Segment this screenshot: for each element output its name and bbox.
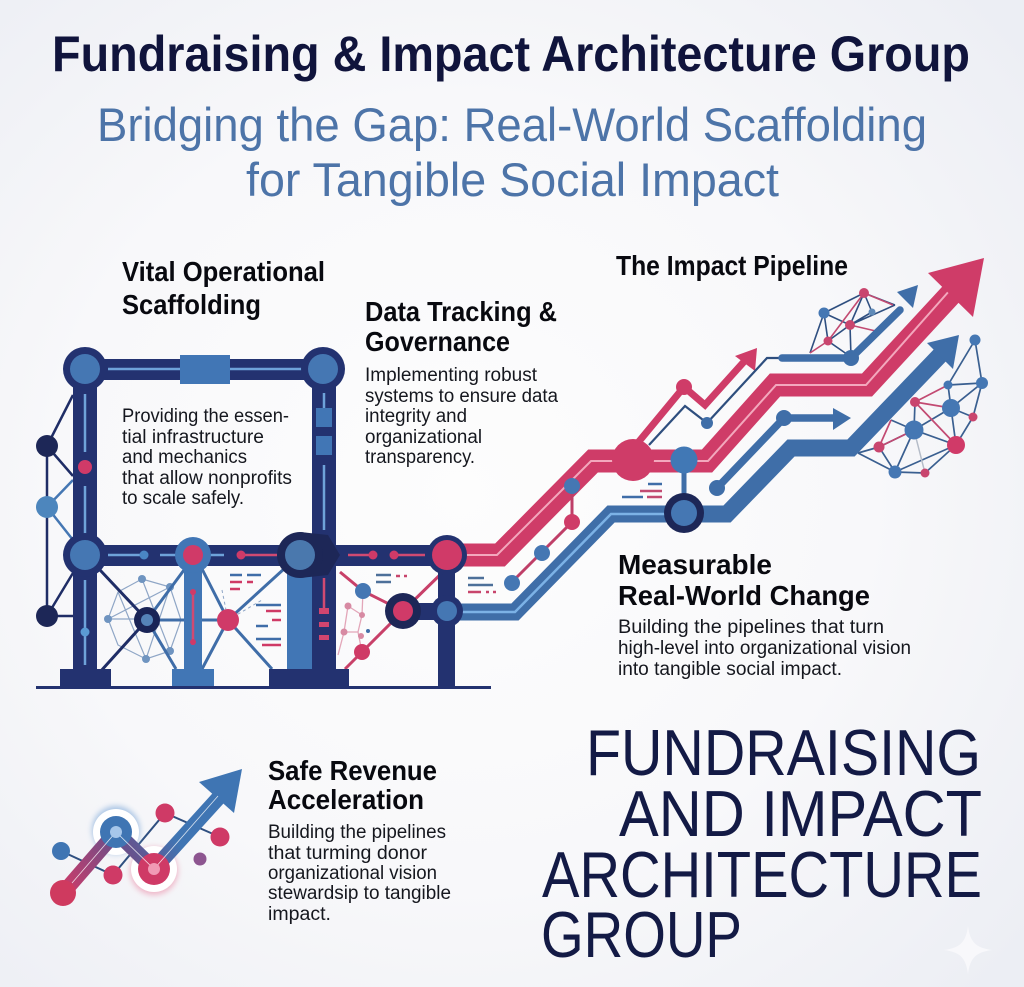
columns and beams [73, 359, 455, 687]
text: scaffolding description: that allow nonprofits [122, 468, 292, 489]
large wordmark: GROUP [541, 898, 742, 971]
bottom network [858, 334, 988, 478]
heading: safe revenue acceleration [268, 755, 437, 815]
pipeline nodes [612, 439, 704, 533]
text: real-world change description: into tangible social impact. [618, 659, 842, 680]
text: revenue description: stewardsip to tangible [268, 883, 451, 904]
heading: data tracking and governance: Data Tracking & [365, 296, 557, 327]
column highlights [85, 369, 425, 665]
data ticks [622, 484, 662, 497]
heading: the impact pipeline: The Impact Pipeline [616, 250, 848, 281]
text: governance description [365, 365, 558, 468]
diagram: impact pipeline [385, 258, 988, 629]
branch nodes [504, 478, 580, 591]
middle blue arrow [709, 408, 851, 496]
lower truss network [100, 565, 285, 672]
text: revenue description: organizational vision [268, 863, 437, 884]
text: scaffolding description: Providing the essen- [122, 406, 289, 427]
icon: sparkle [944, 926, 992, 974]
subtitle: Bridging the Gap: Real-World Scaffolding [97, 98, 927, 151]
text: real-world change description: Building the pipelines that turn [618, 617, 884, 638]
text: governance description: systems to ensure data [365, 386, 558, 407]
left side network [36, 395, 73, 627]
main pink pipeline [447, 258, 984, 555]
text: revenue description: impact. [268, 904, 331, 925]
heading: measurable real-world change: Measurable [618, 549, 772, 580]
text: revenue description: that turming donor [268, 843, 428, 864]
top network [810, 288, 895, 357]
data ticks [230, 575, 496, 645]
blue column and centre post [172, 355, 332, 687]
text: governance description: integrity and [365, 406, 467, 427]
title: Fundraising & Impact Architecture Group [52, 26, 970, 82]
text: scaffolding description: tial infrastructure [122, 427, 264, 448]
heading: vital operational scaffolding [122, 256, 325, 320]
large wordmark [541, 716, 982, 971]
heading: measurable real-world change [618, 549, 870, 611]
small joints [78, 460, 398, 645]
diagram: operational scaffolding [36, 347, 496, 689]
icon: revenue growth arrow [50, 769, 242, 906]
text: revenue description: Building the pipelines [268, 822, 446, 843]
heading: vital operational scaffolding: Scaffolding [122, 289, 261, 320]
heading: data tracking and governance [365, 296, 557, 357]
text: governance description: Implementing robust [365, 365, 538, 386]
navy thin line and blue arrow [649, 285, 918, 445]
subtitle: for Tangible Social Impact [246, 153, 779, 206]
text: revenue description [268, 822, 451, 925]
upper pink arrow [636, 348, 757, 445]
large wordmark: AND IMPACT [619, 777, 982, 850]
text: real-world change description: high-level into organizational vision [618, 638, 911, 659]
pink network right of tower [338, 568, 447, 669]
text: governance description: organizational [365, 427, 482, 448]
scaffold nodes [63, 347, 345, 578]
text: scaffolding description [122, 406, 292, 509]
text: governance description: transparency. [365, 447, 475, 468]
text: real-world change description [618, 617, 911, 680]
heading: measurable real-world change: Real-World Change [618, 580, 870, 611]
heading: vital operational scaffolding: Vital Operational [122, 256, 325, 287]
junction nodes [385, 535, 467, 629]
main blue pipeline [447, 335, 959, 612]
heading: safe revenue acceleration: Safe Revenue [268, 755, 437, 786]
large wordmark: FUNDRAISING [586, 716, 981, 789]
text: scaffolding description: to scale safely. [122, 488, 244, 509]
heading: safe revenue acceleration: Acceleration [268, 784, 424, 815]
heading: data tracking and governance: Governance [365, 326, 510, 357]
foundation [36, 669, 491, 689]
subtitle [97, 98, 927, 206]
text: scaffolding description: and mechanics [122, 447, 247, 468]
